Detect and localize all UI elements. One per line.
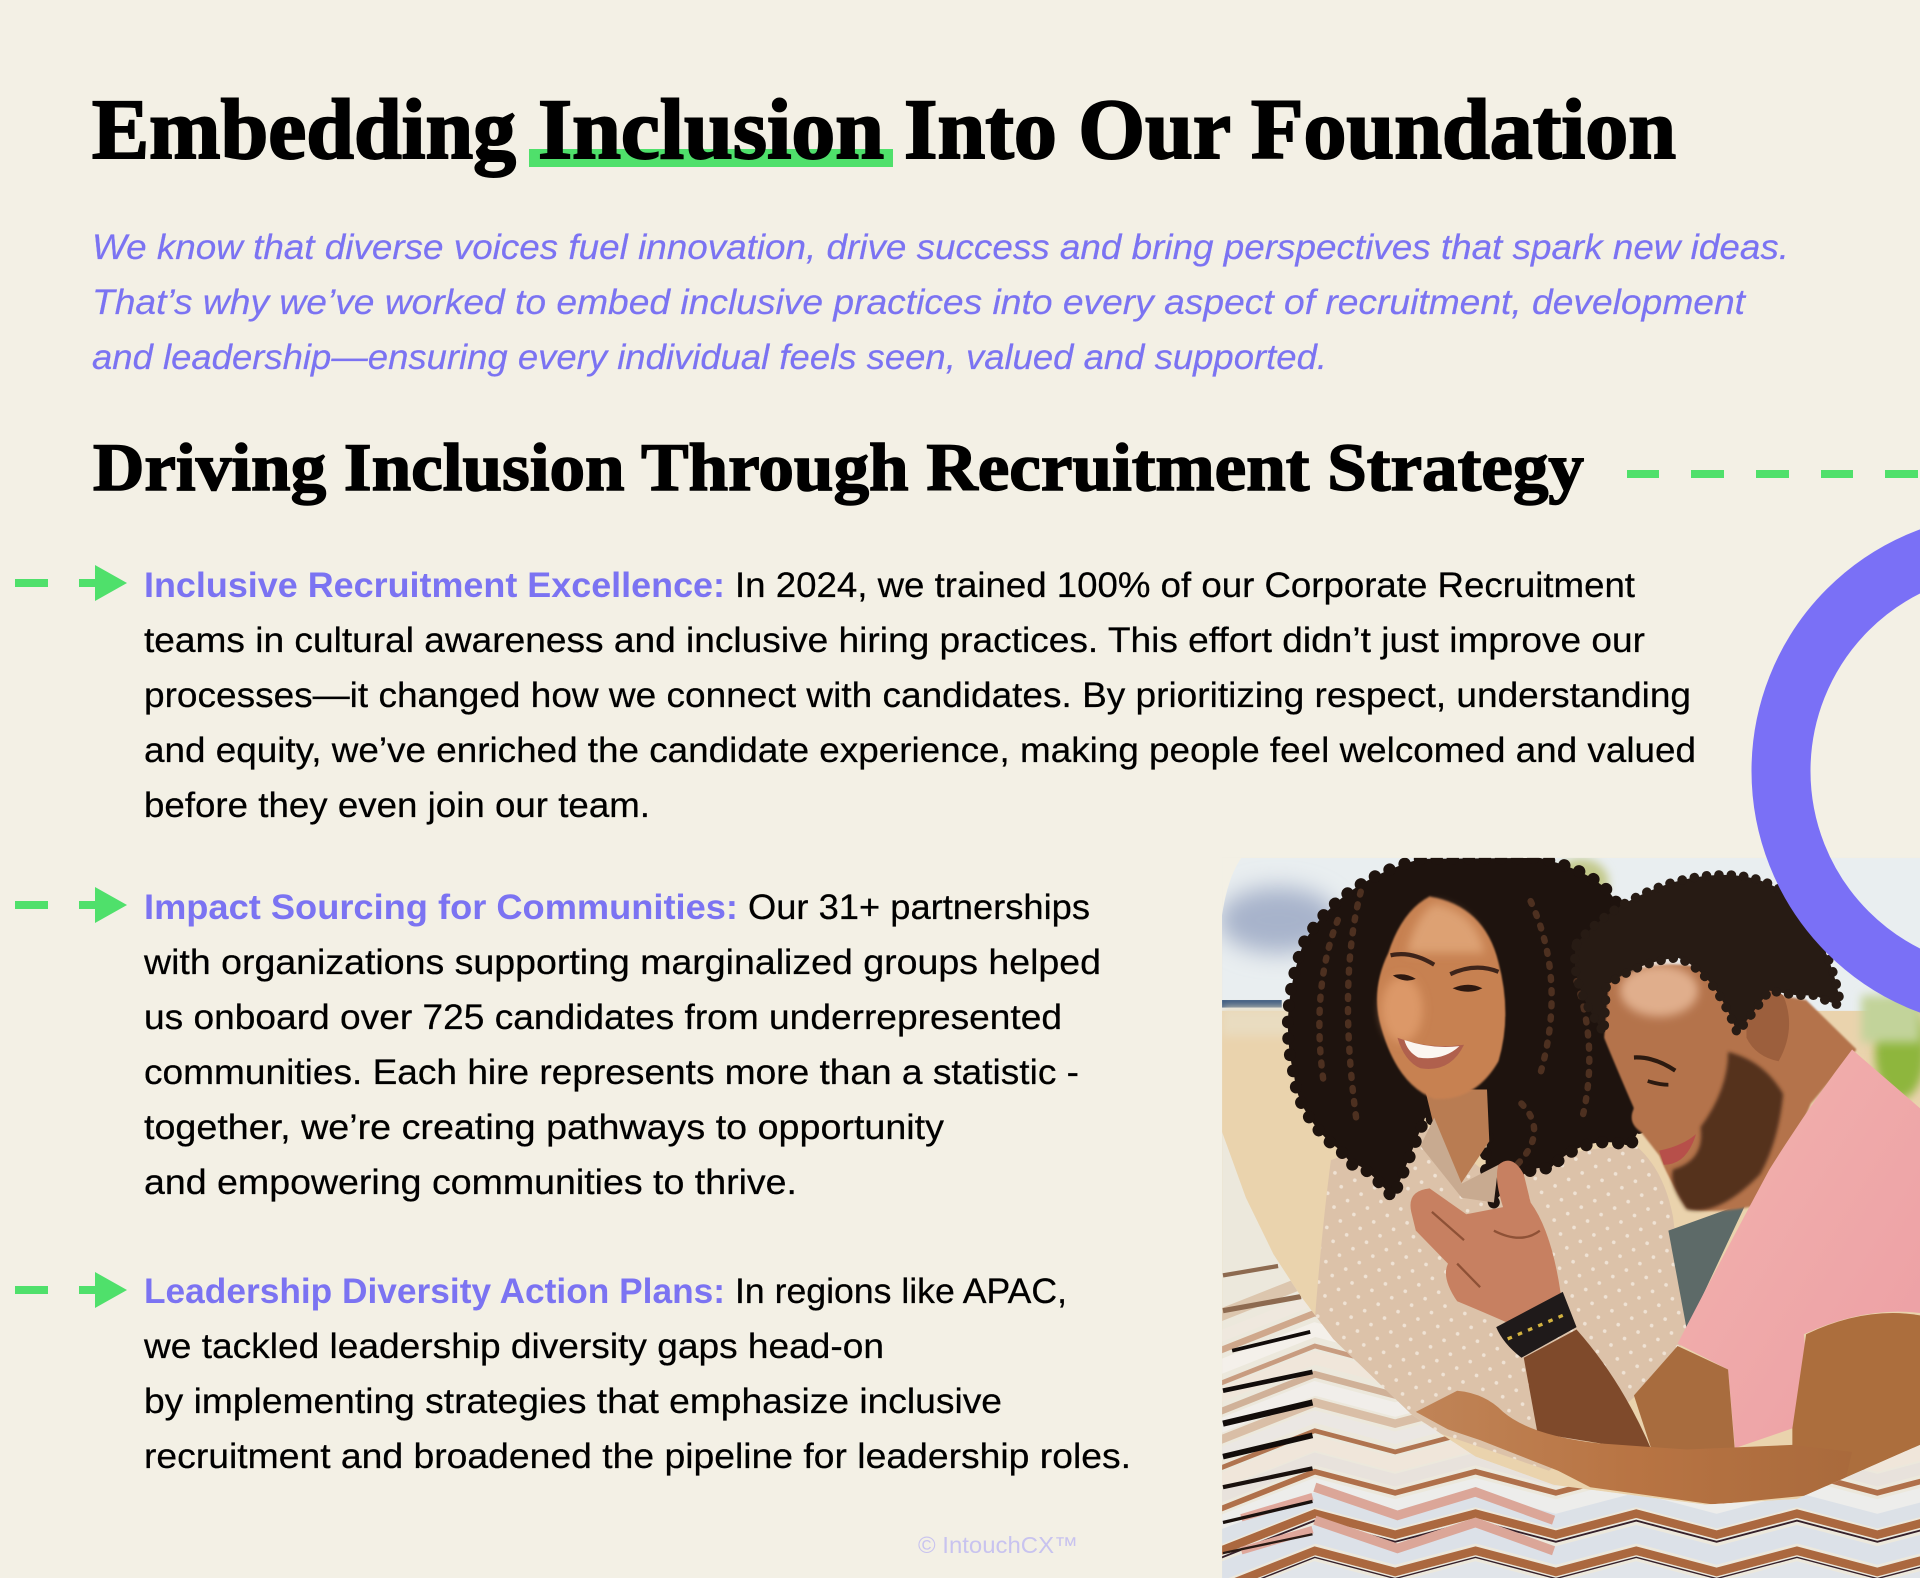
- item 2: impact sourcing for communities: communities. Each hire represents more than a statistic -: [144, 1053, 1079, 1092]
- intro paragraph: We know that diverse voices fuel innovation, drive success and bring perspectives that spark new ideas.: [92, 228, 1789, 267]
- item 3: leadership diversity action plans: recruitment and broadened the pipeline for leadership roles.: [144, 1437, 1131, 1476]
- woman: curly hair: [1288, 858, 1641, 1202]
- section heading: Driving Inclusion Through Recruitment Strategy: [93, 429, 1584, 505]
- title: Inclusion: [538, 81, 884, 177]
- man: pink shirt: [1678, 1049, 1920, 1448]
- zigzag distorted stripes: [1222, 1132, 1920, 1578]
- title: [92, 81, 1676, 177]
- item 2: impact sourcing for communities: Our 31+ partnerships: [748, 888, 1090, 927]
- intro paragraph: That’s why we’ve worked to embed inclusive practices into every aspect of recruitment, development: [92, 283, 1746, 322]
- item 1: inclusive recruitment excellence: In 2024, we trained 100% of our Corporate Recruitment: [735, 566, 1635, 605]
- woman: blouse: [1315, 1127, 1687, 1471]
- arrow marker 3: [15, 1272, 127, 1308]
- title: Into Our Foundation: [904, 81, 1676, 177]
- man: upper arm: [1792, 1313, 1920, 1494]
- item 2: impact sourcing for communities: us onboard over 725 candidates from underrepresented: [144, 998, 1062, 1037]
- item 2: impact sourcing for communities: with organizations supporting marginalized groups helped: [143, 943, 1101, 982]
- copyright footer: © IntouchCX™: [918, 1532, 1078, 1558]
- item 3: leadership diversity action plans: Leadership Diversity Action Plans:: [144, 1272, 725, 1311]
- item 1: inclusive recruitment excellence: Inclusive Recruitment Excellence:: [144, 566, 725, 605]
- item 2: impact sourcing for communities: together, we’re creating pathways to opportunity: [144, 1108, 945, 1147]
- item 1: inclusive recruitment excellence: teams in cultural awareness and inclusive hiring practices. This effort didn’t just improve our: [144, 621, 1645, 660]
- item 1: inclusive recruitment excellence: [144, 566, 1696, 825]
- man: head and beard: [1604, 964, 1857, 1211]
- item 2: impact sourcing for communities: and empowering communities to thrive.: [144, 1163, 797, 1202]
- woman: face: [1377, 896, 1505, 1099]
- item 2: impact sourcing for communities: [143, 888, 1101, 1202]
- arrow marker 1: [15, 565, 127, 601]
- man: curly hair: [1575, 875, 1841, 1033]
- man: arm behind: [1634, 1346, 1735, 1452]
- title highlight underline: [529, 149, 893, 167]
- title: Embedding: [92, 81, 516, 177]
- intro paragraph: and leadership—ensuring every individual feels seen, valued and supported.: [92, 338, 1327, 377]
- item 3: leadership diversity action plans: [143, 1272, 1131, 1476]
- photo background: [1218, 858, 1920, 1578]
- intro paragraph: [92, 228, 1789, 377]
- hand and forearm: [1410, 1161, 1852, 1505]
- item 1: inclusive recruitment excellence: before they even join our team.: [144, 786, 650, 825]
- item 1: inclusive recruitment excellence: and equity, we’ve enriched the candidate experience, making people feel welcomed and valued: [144, 731, 1696, 770]
- dashed green rule: [1627, 470, 1918, 478]
- item 3: leadership diversity action plans: we tackled leadership diversity gaps head-on: [143, 1327, 884, 1366]
- photo: two colleagues smiling at a desk: [1154, 858, 1920, 1578]
- woman: neck and collar: [1420, 1089, 1498, 1202]
- item 2: impact sourcing for communities: Impact Sourcing for Communities:: [144, 888, 738, 927]
- decorative purple ring: [1781, 543, 1920, 999]
- item 3: leadership diversity action plans: by implementing strategies that emphasize inclusive: [144, 1382, 1002, 1421]
- chair: [1668, 1202, 1746, 1330]
- arrow marker 2: [15, 887, 127, 923]
- item 3: leadership diversity action plans: In regions like APAC,: [735, 1272, 1067, 1311]
- item 1: inclusive recruitment excellence: processes—it changed how we connect with candidates. By prioritizing respect, understanding: [144, 676, 1691, 715]
